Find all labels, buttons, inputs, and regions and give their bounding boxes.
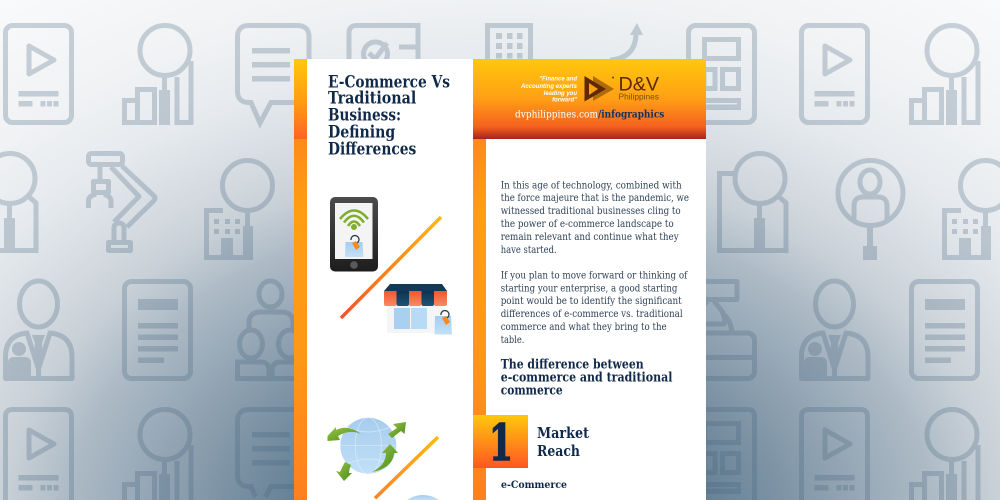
intro paragraph one <box>501 179 689 256</box>
icon: office building <box>488 26 530 76</box>
icon: magnifier chart <box>912 26 978 125</box>
icon: document magnifier <box>720 154 786 253</box>
green arrows <box>328 422 406 481</box>
phone with wifi and shopping bag <box>330 197 378 272</box>
illustration: global market reach <box>328 418 439 500</box>
icon: magnifier chart <box>124 410 191 500</box>
icon: growth arrow <box>610 23 643 60</box>
icon: person magnifier <box>838 160 903 260</box>
title: Traditional <box>328 88 416 107</box>
intro paragraph one: witnessed traditional businesses cling to <box>501 205 681 217</box>
logo tagline: forward" <box>552 98 577 104</box>
title: Business: <box>328 105 401 124</box>
section heading: e-commerce and traditional <box>501 370 672 385</box>
icon: video document <box>802 410 868 500</box>
infographic poster <box>294 59 706 500</box>
section heading <box>501 357 672 398</box>
intro paragraph two: differences of e-commerce vs. traditional <box>501 308 683 320</box>
icon: magnifier chart <box>912 410 978 500</box>
icon: magnifier building <box>206 160 272 260</box>
intro paragraph one: the force majeure that is the pandemic, we <box>501 192 689 204</box>
title: Defining <box>328 123 396 142</box>
icon: magnifier building <box>944 160 1000 260</box>
logo tagline: leading you <box>544 91 577 97</box>
logo tagline: "Finance and <box>539 77 577 83</box>
second globe <box>407 495 439 500</box>
left orange bar <box>294 59 307 500</box>
title <box>328 72 450 159</box>
icon: video document <box>6 26 72 122</box>
diagonal divider <box>341 217 441 318</box>
e-commerce subheading: e-Commerce <box>501 479 567 491</box>
globe <box>340 418 396 474</box>
title: Differences <box>328 140 416 159</box>
icon: businessman <box>802 281 868 380</box>
number badge: 1 <box>489 413 513 472</box>
market reach heading: Reach <box>537 442 580 460</box>
icon: document magnifier <box>0 154 36 253</box>
center orange bar <box>473 139 486 500</box>
icon: text document <box>912 282 978 378</box>
logo wordmark: Philippines <box>618 92 659 102</box>
icon: dashboard layout <box>688 26 754 122</box>
icon: dashboard layout <box>688 410 754 500</box>
icon: checklist <box>349 26 420 70</box>
illustration: e-commerce versus store <box>330 197 452 334</box>
intro paragraph two: starting your enterprise, a good starting <box>501 282 678 294</box>
poster white base <box>294 59 706 500</box>
intro paragraph one: In this age of technology, combined with <box>501 179 682 191</box>
icon: hand over stack <box>686 282 756 378</box>
icon: speech bubble <box>238 410 309 497</box>
logo mark <box>584 76 614 102</box>
section heading: commerce <box>501 383 563 398</box>
icon: speech bubble <box>238 26 309 123</box>
header banner <box>473 59 706 139</box>
market reach heading <box>537 424 589 460</box>
intro paragraph two: point would be to identify the significant <box>501 295 682 307</box>
icon: video document <box>6 410 72 500</box>
intro paragraph two: commerce and what they bring to the <box>501 321 667 333</box>
section heading: The difference between <box>501 357 644 372</box>
logo tagline <box>520 77 578 104</box>
intro paragraph one: the power of e-commerce landscape to <box>501 218 674 230</box>
logo wordmark: D&V <box>618 75 659 96</box>
storefront with shopping bag <box>384 284 452 334</box>
icon: video document <box>802 26 868 122</box>
intro paragraph two: table. <box>501 334 524 346</box>
market reach heading: Market <box>537 424 589 442</box>
logo tagline: Accounting experts <box>520 84 578 90</box>
number badge <box>473 413 528 472</box>
icon: text document <box>124 282 190 378</box>
icon: robot arm <box>88 154 155 250</box>
icon: businessman <box>6 281 72 380</box>
icon: magnifier chart <box>124 26 191 125</box>
website url: dvphilippines.com <box>515 109 598 121</box>
diagonal divider <box>375 437 438 498</box>
intro paragraph two: If you plan to move forward or thinking of <box>501 270 688 282</box>
icon: group of people <box>237 281 309 381</box>
intro paragraph one: have started. <box>501 244 557 256</box>
intro paragraph two <box>501 270 688 346</box>
intro paragraph one: remain relevant and continue what they <box>501 231 679 243</box>
website url: /infographics <box>598 109 664 121</box>
title: E-Commerce Vs <box>328 72 450 91</box>
website url <box>515 109 664 121</box>
